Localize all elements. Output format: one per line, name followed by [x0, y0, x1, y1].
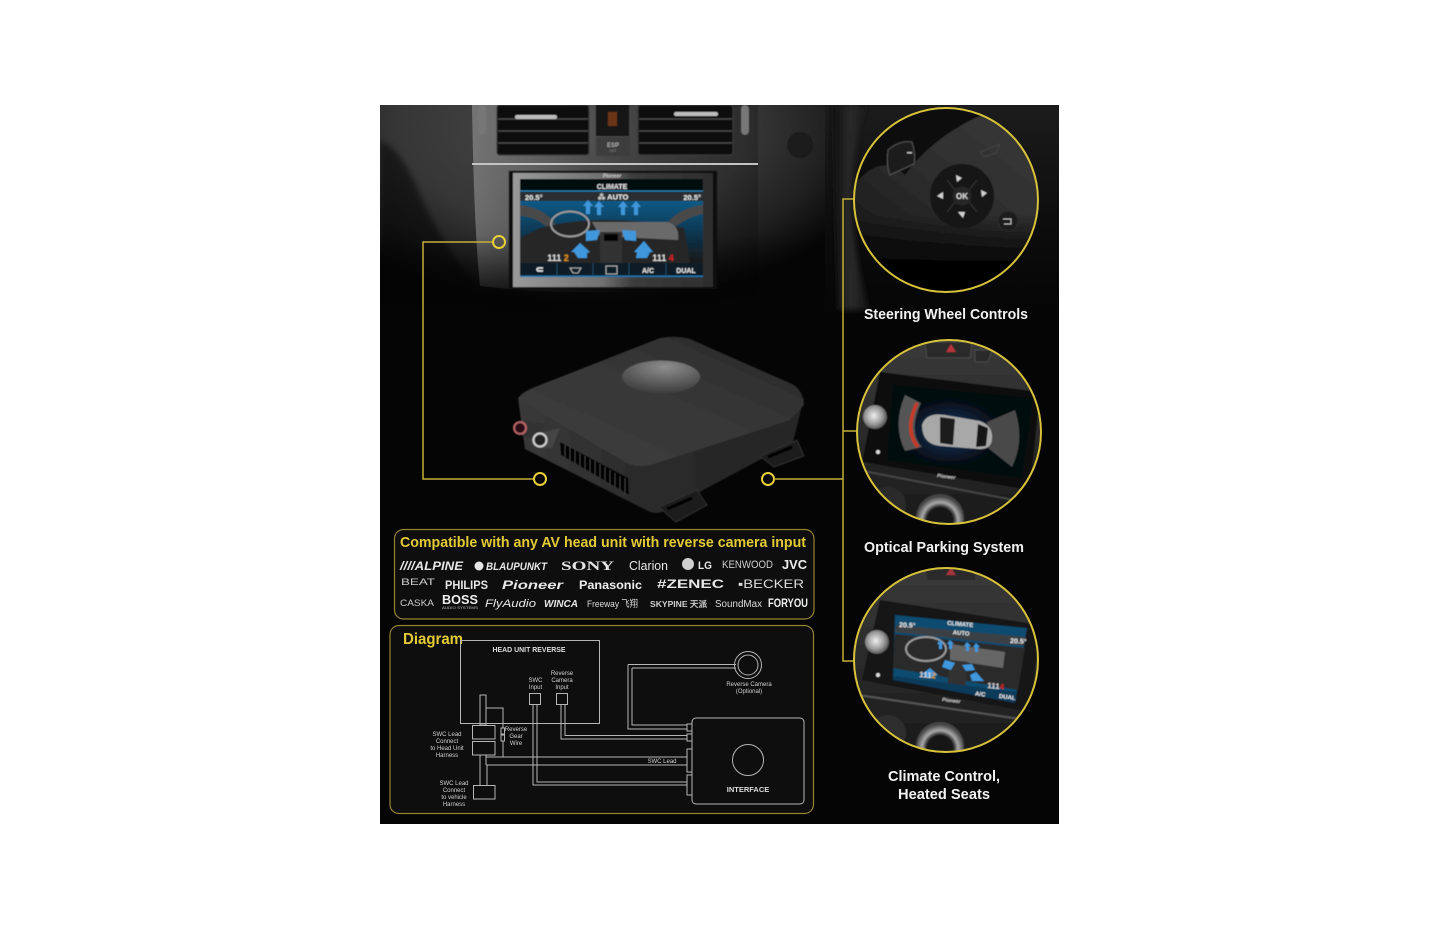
wiring connector block	[560, 442, 629, 495]
wiring lines	[480, 664, 736, 785]
brand logos as text: Freeway 飞翔	[587, 598, 638, 610]
brand logos as text: ////ALPINE	[399, 559, 464, 573]
brand logos as text: PHILIPS	[445, 578, 488, 592]
brand logos as text: Clarion	[629, 558, 668, 573]
circle photo: optical parking system: Pioneer	[937, 473, 957, 481]
wiring labels: Camera	[551, 678, 573, 684]
head unit box	[460, 640, 600, 724]
interface box	[687, 718, 804, 804]
circle photo: climate control: DUAL	[998, 694, 1016, 702]
wiring labels: Input	[529, 685, 542, 691]
head unit screen showing climate view: 111 4	[652, 253, 674, 263]
brand logos as text: AUDIO SYSTEMS	[442, 605, 478, 610]
heading: diagram: Diagram	[403, 631, 463, 648]
air vents and ESP switch: ESP	[607, 143, 619, 149]
caption: climate control, heated seats: Heated Seats	[898, 786, 990, 803]
circle photo: climate control: A/C	[975, 691, 986, 699]
head unit screen showing climate view: 111 2	[547, 253, 569, 263]
wiring labels: Harness	[436, 753, 458, 759]
head unit box: HEAD UNIT REVERSE	[492, 645, 566, 654]
caption: steering wheel controls: Steering Wheel Controls	[864, 306, 1028, 323]
reverse camera icon and label	[726, 652, 772, 695]
brand logos as text: SKYPINE 天派	[650, 599, 707, 609]
wiring labels: Wire	[510, 741, 523, 747]
air vents and ESP switch: OFF	[610, 149, 616, 153]
caption: optical parking system: Optical Parking System	[864, 539, 1024, 556]
brand logos as text: LG	[698, 560, 712, 572]
brand logos as text: KENWOOD	[722, 559, 773, 571]
circle photo: climate control: 1112	[919, 670, 937, 681]
black infographic panel	[380, 105, 1059, 824]
wiring labels: Connect	[443, 788, 466, 794]
harness connector boxes	[472, 726, 504, 799]
head unit screen showing climate view: DUAL	[676, 268, 696, 275]
head unit screen showing climate view: CLIMATE	[597, 184, 628, 191]
circle photo: steering wheel controls: OK	[956, 192, 968, 201]
interface module product photo	[514, 337, 804, 522]
wiring labels: Input	[555, 685, 569, 691]
brand logos as text: WINCA	[544, 599, 578, 610]
circle photo: steering wheel controls	[850, 105, 1045, 302]
circle photo: climate control: 1114	[987, 681, 1005, 692]
brand logos as text: Pioneer	[502, 578, 565, 592]
panel: compatible brands	[394, 530, 814, 619]
housing sides	[518, 398, 804, 513]
input ports	[530, 694, 568, 704]
brand logos as text: CASKA	[400, 598, 435, 609]
brand logos as text: SoundMax	[715, 599, 762, 610]
brand logos as text: Panasonic	[579, 578, 642, 592]
reverse camera icon and label: Reverse Camera	[726, 682, 772, 688]
brand logos as text: BOSS	[442, 592, 478, 607]
reverse camera icon and label: (Optional)	[736, 689, 762, 695]
wiring labels: Reverse	[551, 671, 574, 677]
brand logos as text: FlyAudio	[485, 598, 536, 610]
head unit screen showing climate view	[509, 171, 717, 289]
head unit screen showing climate view: Pioneer	[603, 174, 622, 180]
circle photo: climate control: 20.5°	[899, 621, 916, 630]
wiring labels: Harness	[443, 802, 465, 808]
head unit screen showing climate view: 20.5°	[525, 193, 543, 202]
head unit screen showing climate view: ⁂ AUTO	[598, 192, 628, 202]
caption: climate control, heated seats	[888, 768, 1000, 803]
wiring labels: to Head Unit	[430, 746, 464, 752]
brand logos as text: JVC	[782, 557, 808, 572]
wiring labels: SWC	[528, 678, 543, 684]
mounting tabs	[659, 440, 804, 522]
connector lines and dots	[423, 199, 857, 661]
brand logos as text: BEAT	[401, 577, 436, 587]
dashboard surface	[380, 105, 825, 292]
brand logos as text: SONY	[561, 558, 615, 573]
head unit screen showing climate view: A/C	[642, 268, 654, 275]
air vents and ESP switch	[478, 105, 812, 157]
wiring labels: SWC Lead	[439, 781, 469, 787]
RCA connectors	[514, 420, 560, 448]
wiring labels: SWC Lead	[432, 732, 462, 738]
brand logos as text: FORYOU	[768, 596, 808, 610]
circle photo: climate control: Pioneer	[942, 697, 962, 705]
wiring labels: Connect	[436, 739, 459, 745]
head unit screen showing climate view: 20.5°	[683, 193, 701, 202]
photo: car dashboard with head unit	[380, 105, 1059, 312]
circle photo: optical parking system	[856, 339, 1042, 525]
brand logos as text	[399, 557, 808, 610]
circle photo: climate control: 20.5°	[1010, 637, 1027, 646]
wiring labels: SWC Lead	[647, 759, 677, 765]
heading: compatibility: Compatible with any AV head unit with reverse camera input	[400, 534, 806, 551]
brand logos as text: BLAUPUNKT	[486, 561, 548, 573]
interface box: INTERFACE	[727, 785, 769, 794]
circle photo: climate control	[853, 567, 1039, 753]
circle photo: climate control: CLIMATE	[947, 621, 973, 629]
steering wheel backdrop	[825, 105, 1059, 315]
wiring labels: Reverse	[505, 727, 528, 733]
caption: climate control, heated seats: Climate Control,	[888, 768, 1000, 785]
panel: wiring diagram	[390, 626, 814, 814]
circle photo: climate control: AUTO	[952, 630, 970, 638]
brand logos as text: ▪BECKER	[738, 577, 804, 591]
dome	[622, 360, 700, 394]
brand logos as text: #ZENEC	[657, 577, 724, 591]
housing top	[518, 337, 804, 466]
wiring labels: Gear	[509, 734, 523, 740]
wiring labels	[430, 671, 677, 808]
wiring labels: to vehicle	[441, 795, 467, 801]
